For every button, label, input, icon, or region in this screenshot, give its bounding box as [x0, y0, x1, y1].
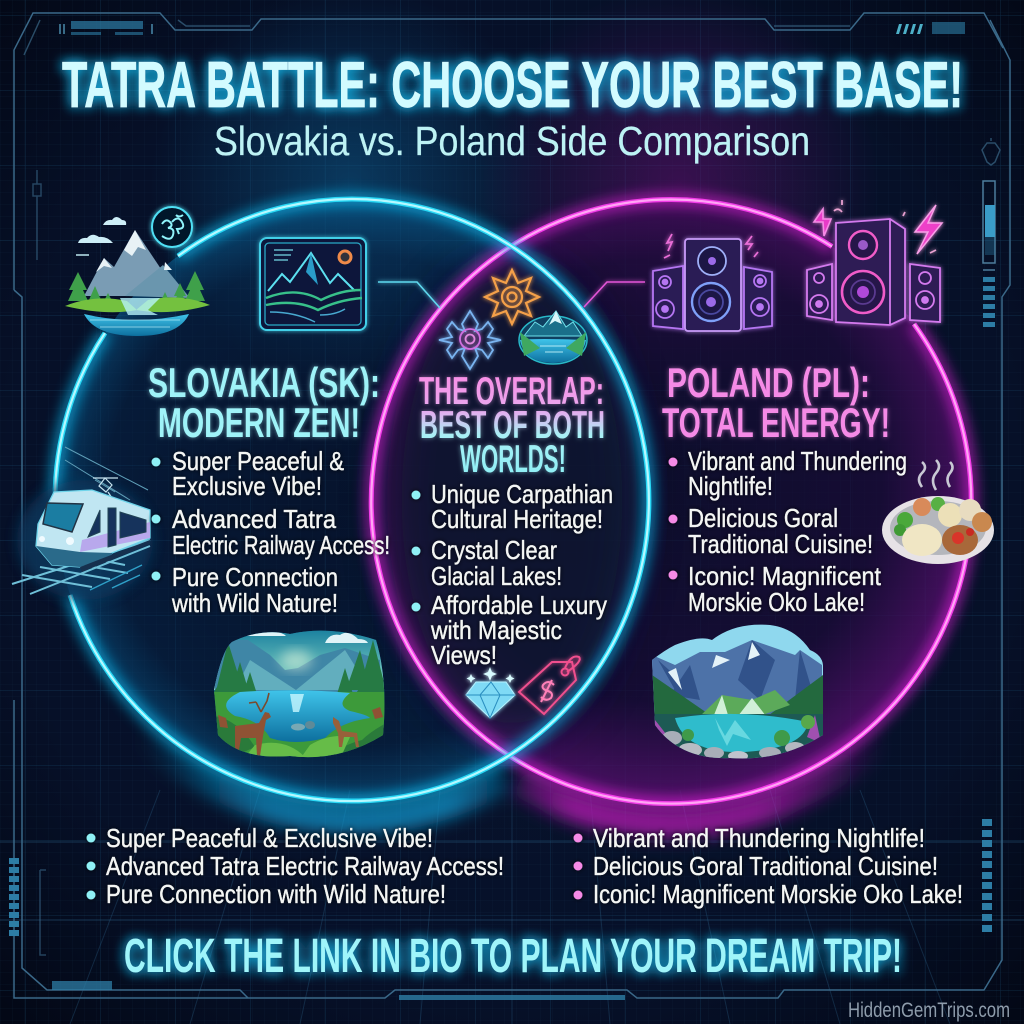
venn circle: Poland magenta — [371, 200, 971, 804]
panel: overlap bullet list: Unique Carpathian — [431, 479, 613, 509]
panel: Poland heading: TOTAL ENERGY! — [662, 399, 890, 446]
icon: speakers group 1 — [653, 234, 772, 331]
venn area fills — [55, 199, 972, 804]
panel: overlap bullet list: Affordable Luxury — [431, 590, 607, 620]
floor reflection of circles — [140, 728, 885, 824]
panel: overlap bullet list: Cultural Heritage! — [431, 504, 603, 534]
panel: overlap bullet list: Views! — [431, 640, 497, 670]
panel: overlap bullet list: Crystal Clear — [431, 535, 557, 565]
panel: overlap heading: WORLDS! — [460, 438, 566, 481]
panel: Slovakia bullet list — [152, 446, 390, 618]
icon: speakers group 2 — [807, 219, 940, 325]
bottom list: Slovakia: Advanced Tatra Electric Railway Access! — [106, 851, 504, 881]
icon: diamond with sparkles — [466, 667, 515, 718]
bottom list: Poland — [574, 823, 963, 909]
panel: overlap bullet list — [412, 479, 613, 670]
panel: Poland bullet list: Morskie Oko Lake! — [688, 587, 865, 617]
icon: plate of goral food — [882, 460, 994, 564]
panel: Slovakia bullet list: Advanced Tatra — [172, 504, 336, 534]
icon: sun emblem — [485, 270, 539, 324]
bottom list: Poland: Vibrant and Thundering Nightlife! — [593, 823, 925, 853]
icon: nature scene with deer — [214, 630, 384, 758]
icon: morskie oko lake — [652, 624, 823, 758]
panel: Slovakia heading: MODERN ZEN! — [158, 399, 360, 446]
connector line left — [378, 282, 440, 308]
panel: Slovakia bullet list: Electric Railway Access! — [172, 530, 390, 560]
icon: price tag — [519, 656, 580, 714]
panel: Slovakia heading: SLOVAKIA (SK): — [148, 359, 380, 406]
panel: Poland bullet list: Iconic! Magnificent — [688, 561, 882, 591]
panel: Poland bullet list: Vibrant and Thundering — [688, 446, 907, 476]
bottom list: Slovakia: Super Peaceful & Exclusive Vibe! — [106, 823, 433, 853]
panel: Poland heading — [662, 359, 890, 446]
icon: framed mountain panel — [260, 238, 366, 330]
panel: Poland bullet list: Delicious Goral — [688, 503, 838, 533]
bottom list: Poland: Iconic! Magnificent Morskie Oko Lake! — [593, 879, 963, 909]
panel: Slovakia heading — [148, 359, 380, 446]
bottom list: Slovakia — [86, 823, 504, 909]
panel: Poland bullet list: Nightlife! — [688, 471, 773, 501]
panel: overlap heading: BEST OF BOTH — [420, 404, 605, 447]
panel: overlap bullet list: Glacial Lakes! — [431, 561, 562, 591]
panel: overlap heading — [419, 370, 605, 481]
panel: overlap heading: THE OVERLAP: — [419, 370, 604, 413]
panel: Poland bullet list — [668, 446, 907, 617]
bottom list: Slovakia: Pure Connection with Wild Nature! — [106, 879, 446, 909]
connector line right — [584, 282, 645, 307]
bottom list: Poland: Delicious Goral Traditional Cuisine! — [593, 851, 938, 881]
panel: Poland bullet list: Traditional Cuisine! — [688, 529, 873, 559]
panel: Slovakia bullet list: with Wild Nature! — [171, 588, 338, 618]
icon: glacial lake emblem — [519, 311, 587, 364]
venn circle: Slovakia cyan — [55, 199, 649, 801]
panel: Poland heading: POLAND (PL): — [667, 359, 870, 406]
icon: mountain lake with om badge — [65, 207, 210, 336]
panel: Slovakia bullet list: Pure Connection — [172, 562, 338, 592]
panel: overlap bullet list: with Majestic — [430, 615, 562, 645]
panel: Slovakia bullet list: Exclusive Vibe! — [172, 471, 322, 501]
subtitle: Slovakia vs. Poland Side Comparison — [214, 118, 810, 164]
icon: carpathian snowflake emblem — [439, 311, 501, 369]
icon: lightning bolts and notes — [814, 200, 942, 254]
icon: train — [12, 447, 153, 600]
panel: Slovakia bullet list: Super Peaceful & — [172, 446, 344, 476]
